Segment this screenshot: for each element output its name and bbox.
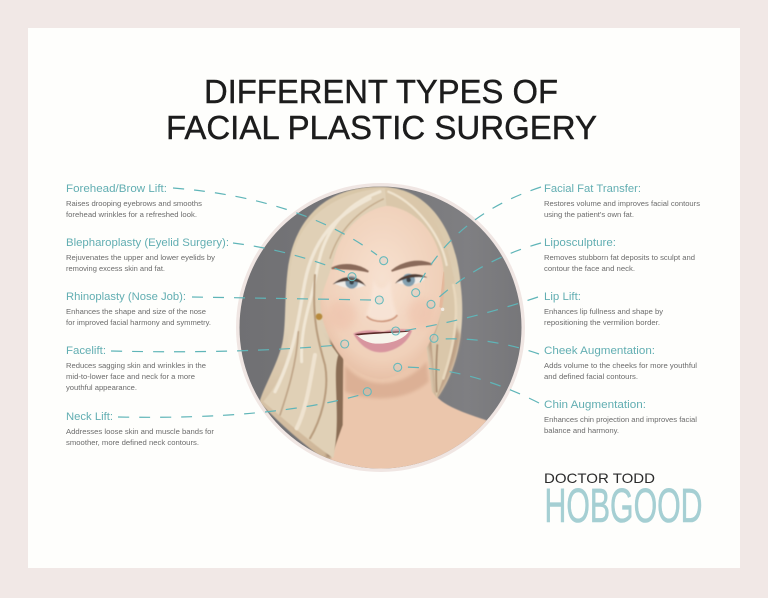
label: Cheek Augmentation: Cheek Augmentation: [544,345,655,357]
label: Liposculpture: Liposculpture: [544,237,616,249]
label: Cheek Augmentation [544,345,697,381]
label: Forehead/Brow Lift: Raises drooping eyebrows and smooths [66,199,202,208]
label: Facelift: mid-to-lower face and neck for a more [66,372,195,381]
label: Forehead/Brow Lift [66,183,202,219]
leader lines with target dots [111,187,541,417]
label: Forehead/Brow Lift: Forehead/Brow Lift: [66,183,167,195]
label: Neck Lift: Addresses loose skin and muscle bands for [66,427,215,436]
label: Chin Augmentation: balance and harmony. [544,426,619,435]
portrait photo circle [236,183,526,475]
label: Cheek Augmentation: Adds volume to the cheeks for more youthful [544,361,697,370]
label: Rhinoplasty: Rhinoplasty (Nose Job): [66,291,186,303]
logo: Doctor Todd Hobgood [544,470,702,533]
label: Rhinoplasty: for improved facial harmony and symmetry. [66,318,211,327]
label: Facial Fat Transfer: using the patient's own fat. [544,210,634,219]
label: Liposculpture: Removes stubborn fat deposits to sculpt and [544,253,695,262]
label: Lip Lift: Lip Lift: [544,291,581,303]
label: Neck Lift: Neck Lift: [66,411,113,423]
label: Chin Augmentation [544,399,697,435]
label: Lip Lift [544,291,663,327]
label: Facelift: youthful appearance. [66,383,137,392]
label: Chin Augmentation: Chin Augmentation: [544,399,646,411]
label: Facial Fat Transfer [544,183,700,219]
label: Cheek Augmentation: and defined facial contours. [544,372,638,381]
label: Chin Augmentation: Enhances chin projection and improves facial [544,415,697,424]
label: Forehead/Brow Lift: forehead wrinkles for a refreshed look. [66,210,197,219]
title: FACIAL PLASTIC SURGERY [166,109,597,146]
title [166,73,597,146]
label: Facelift: Reduces sagging skin and wrinkles in the [66,361,206,370]
label: Blepharoplasty: Blepharoplasty (Eyelid Surgery): [66,237,229,249]
label: Neck Lift: smoother, more defined neck contours. [66,438,199,447]
label: Lip Lift: Enhances lip fullness and shape by [544,307,663,316]
label: Rhinoplasty [66,291,211,327]
label: Facelift: Facelift: [66,345,106,357]
label: Blepharoplasty [66,237,229,273]
logo: Doctor Todd Hobgood: DOCTOR TODD [544,470,655,486]
label: Neck Lift [66,411,215,447]
label: Facelift [66,345,206,392]
label: Lip Lift: repositioning the vermilion border. [544,318,660,327]
title: DIFFERENT TYPES OF [204,73,558,110]
label: Blepharoplasty: removing excess skin and fat. [66,264,165,273]
label: Liposculpture [544,237,695,273]
label: Rhinoplasty: Enhances the shape and size of the nose [66,307,206,316]
label: Facial Fat Transfer: Facial Fat Transfer: [544,183,641,195]
label: Liposculpture: contour the face and neck. [544,264,635,273]
label: Blepharoplasty: Rejuvenates the upper and lower eyelids by [66,253,215,262]
label: Facial Fat Transfer: Restores volume and improves facial contours [544,199,700,208]
